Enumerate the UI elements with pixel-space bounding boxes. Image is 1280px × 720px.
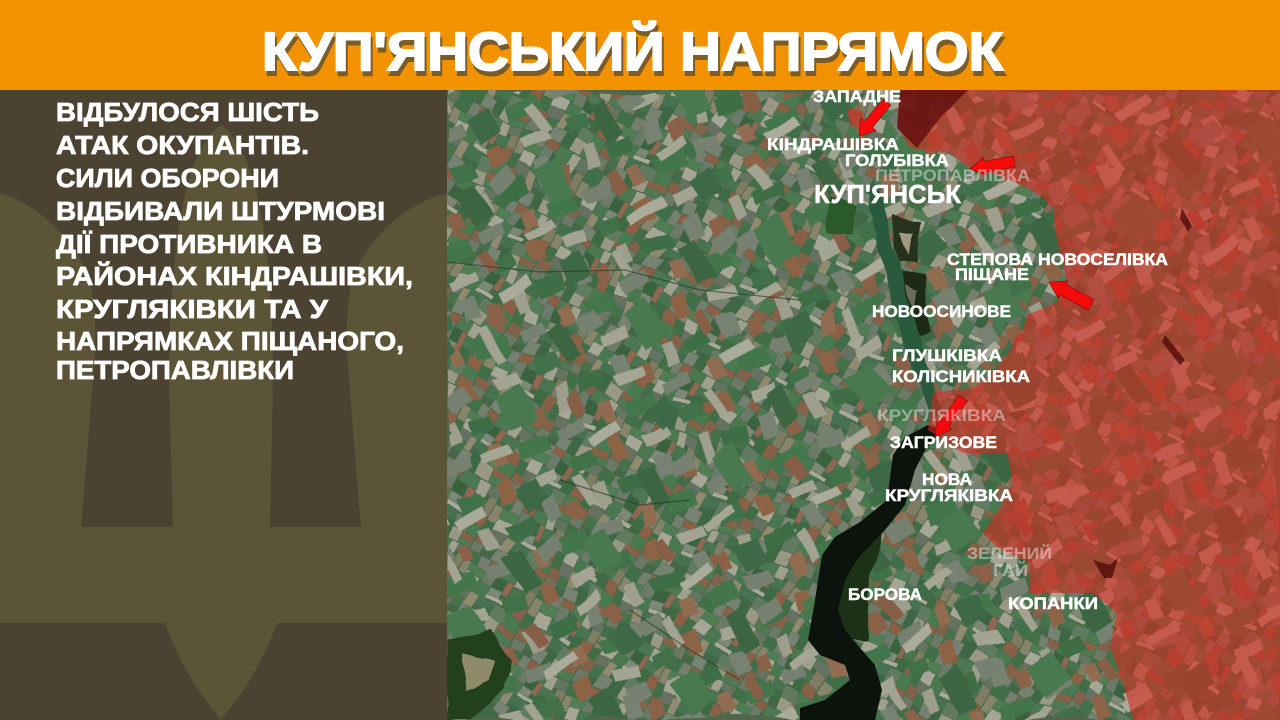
label: Hai: ГАЙ	[993, 561, 1028, 580]
summary text: НАПРЯМКАХ ПІЩАНОГО,	[56, 326, 404, 356]
left panel with trident emblem	[0, 90, 447, 720]
summary text: ДІЇ ПРОТИВНИКА В	[56, 229, 322, 259]
label: Nova: НОВА	[922, 470, 972, 489]
label: Novoosynove: НОВООСИНОВЕ	[872, 302, 1011, 321]
label: Zelenyi: ЗЕЛЕНИЙ	[967, 544, 1052, 563]
summary text: СИЛИ ОБОРОНИ	[56, 163, 279, 193]
label: Zapadne: ЗАПАДНЕ	[813, 87, 901, 106]
arrow: towards Pishchane	[1048, 280, 1094, 311]
ravines and roads	[447, 262, 800, 680]
forests	[447, 195, 930, 720]
arrow: towards Kindrashivka	[858, 98, 892, 136]
label: Kolisnykivka: КОЛІСНИКІВКА	[892, 367, 1030, 386]
label: Novoselivka: НОВОСЕЛІВКА	[1038, 250, 1168, 269]
trident emblem	[0, 125, 447, 720]
red-zone ravines	[1093, 208, 1192, 578]
summary text: ПЕТРОПАВЛІВКИ	[56, 355, 294, 385]
small red patch near Zapadne	[847, 108, 863, 128]
arrow: towards Petropavlivka	[970, 156, 1016, 176]
Kupiansk town and river valley	[868, 190, 942, 420]
place labels	[767, 87, 1168, 613]
label: Kindrashivka: КІНДРАШІВКА	[767, 135, 899, 154]
satellite map	[447, 87, 1280, 720]
label: Hlushkivka: ГЛУШКІВКА	[892, 346, 1002, 365]
header bar	[0, 0, 1280, 90]
label: Kruhliakivka: КРУГЛЯКІВКА	[885, 486, 1013, 505]
dark red wooded patch	[897, 90, 968, 148]
farmland fields	[447, 90, 1280, 720]
arrows	[851, 96, 1096, 442]
summary text: КРУГЛЯКІВКИ ТА У	[56, 294, 329, 324]
label: Pishchane: ПІЩАНЕ	[955, 265, 1029, 284]
label: Kupiansk: КУП'ЯНСЬК	[814, 179, 961, 209]
summary text: ВІДБИВАЛИ ШТУРМОВІ	[56, 196, 385, 226]
label: Borova: БОРОВА	[848, 585, 922, 604]
label: Kopanky: КОПАНКИ	[1008, 594, 1098, 613]
arrow: towards Kruhliakivka	[934, 394, 968, 438]
summary text	[56, 97, 413, 385]
label: Petropavlivka: ПЕТРОПАВЛІВКА	[875, 166, 1030, 185]
occupied territory overlay	[847, 90, 1280, 720]
label: Zahryzove: ЗАГРИЗОВЕ	[890, 433, 997, 452]
river Oskil reservoir	[800, 425, 942, 720]
title: КУП'ЯНСЬКИЙ НАПРЯМОК	[262, 21, 1004, 82]
label: Kruhliakivka (translucent): КРУГЛЯКІВКА	[877, 406, 1006, 425]
summary text: ВІДБУЛОСЯ ШІСТЬ	[56, 97, 319, 127]
label: Holubivka: ГОЛУБІВКА	[845, 151, 949, 170]
summary text: РАЙОНАХ КІНДРАШІВКИ,	[56, 261, 413, 291]
title shadow: КУП'ЯНСЬКИЙ НАПРЯМОК	[264, 26, 1006, 87]
haze to mute field colours	[447, 90, 1280, 720]
label: Stepova: СТЕПОВА	[947, 250, 1033, 269]
summary text: АТАК ОКУПАНТІВ.	[56, 130, 309, 160]
